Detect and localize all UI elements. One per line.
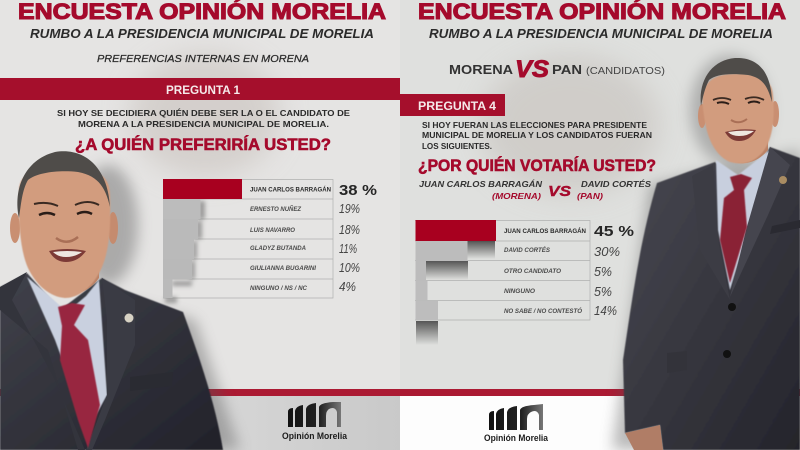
question text: pregunta 1 (57, 108, 350, 129)
portrait shadow (78, 165, 240, 450)
hair (17, 151, 110, 218)
heading: Morena vs PAN: PAN (552, 63, 582, 77)
footer: right logo band (400, 396, 800, 450)
face (703, 74, 774, 163)
neck (716, 125, 768, 163)
banner: pregunta 4: PREGUNTA 4 (418, 101, 497, 113)
matchup: candidates: (PAN) (577, 191, 603, 201)
right ear (108, 212, 118, 244)
bar: Ninguno 4% (163, 279, 172, 298)
matchup: candidates: VS (548, 183, 571, 200)
left lapel (0, 272, 85, 450)
labels and values: JUAN CARLOS BARRAGÁN (504, 228, 586, 235)
panel: left background (0, 0, 400, 390)
labels and values: 4% (339, 280, 356, 294)
question text: pregunta 4: SI HOY FUERAN LAS ELECCIONES PARA PRESIDENTE (422, 120, 647, 130)
bar: Luis Navarro 18% (163, 219, 198, 239)
hair (701, 58, 772, 106)
banner: pregunta 1: PREGUNTA 1 (166, 85, 241, 97)
labels and values: NO SABE / NO CONTESTÓ (504, 308, 582, 315)
labels and values: 38 % (339, 182, 377, 199)
labels and values: GLADYZ BUTANDA (250, 246, 306, 252)
button lower (723, 350, 731, 358)
heading: Morena vs PAN: (CANDIDATOS) (586, 66, 665, 77)
lapel pin (779, 176, 787, 184)
bar chart: pregunta 1 (163, 179, 377, 303)
portrait shadow (612, 55, 800, 450)
lapel pin (124, 314, 134, 322)
logo: left: Opinión Morelia (282, 431, 348, 441)
heading: Morena vs PAN: VS (515, 56, 549, 83)
breast pocket (770, 220, 800, 234)
hand (625, 425, 663, 450)
nose (56, 237, 78, 242)
bar: No sabe 14% (416, 301, 438, 320)
labels and values: ERNESTO NUÑEZ (250, 206, 301, 213)
labels and values: 11% (339, 242, 357, 256)
bar: Giulianna Bugarini 10% (163, 259, 192, 279)
right lapel (730, 147, 790, 297)
question heading: a quien preferiria: ¿A QUIÉN PREFERIRÍA USTED? (75, 135, 331, 154)
neck (30, 250, 99, 294)
side pocket (667, 351, 687, 373)
portrait: candidate right (612, 55, 800, 450)
labels and values: NINGUNO / NS / NC (250, 286, 308, 292)
matchup: candidates: (MORENA) (492, 191, 541, 201)
logo: right: Opinión Morelia (484, 433, 549, 443)
shirt (27, 277, 107, 430)
question text: pregunta 4: LOS SIGUIENTES. (422, 141, 492, 151)
banner: pregunta 4 (400, 94, 505, 116)
logo: left (282, 402, 348, 441)
labels and values: OTRO CANDIDATO (504, 269, 561, 275)
question heading: por quien votaria: ¿POR QUIÉN VOTARÍA USTED? (418, 156, 656, 175)
matchup: candidates: JUAN CARLOS BARRAGÁN (419, 179, 543, 189)
right ear (771, 101, 779, 127)
nose (731, 119, 747, 122)
button upper (728, 303, 736, 311)
labels and values: 45 % (594, 223, 634, 240)
labels and values: JUAN CARLOS BARRAGÁN (250, 186, 331, 194)
bar shadows (416, 241, 495, 345)
bar: David Cortés 30% (416, 241, 468, 261)
breast pocket (130, 372, 173, 391)
labels and values: 10% (339, 261, 360, 275)
bar: Juan Carlos Barragán 45% (416, 220, 496, 241)
bar: Juan Carlos Barragán 38% (163, 179, 242, 199)
bar shadows (165, 201, 205, 303)
subtitle: left: RUMBO A LA PRESIDENCIA MUNICIPAL DE MORELIA (30, 26, 374, 41)
labels and values: 30% (594, 245, 620, 259)
eyes and brows (713, 97, 764, 104)
smile (725, 129, 756, 141)
suit (623, 147, 800, 450)
left ear (698, 104, 706, 128)
labels and values: 19% (339, 202, 360, 216)
matchup: candidates: DAVID CORTÉS (581, 179, 651, 189)
subtitle: right: RUMBO A LA PRESIDENCIA MUNICIPAL DE MORELIA (429, 26, 773, 41)
question text: pregunta 1: SI HOY SE DECIDIERA QUIÉN DEBE SER LA O EL CANDIDATO DE (57, 108, 350, 118)
footer: left logo band (0, 396, 400, 450)
bar chart: pregunta 4 (415, 220, 634, 345)
labels and values: 5% (594, 285, 612, 299)
logo: right (484, 404, 549, 443)
shirt (716, 150, 770, 290)
tie (58, 303, 100, 448)
labels and values: DAVID CORTÉS (504, 246, 550, 254)
portrait: candidate left (0, 151, 240, 450)
question text: pregunta 4: MUNICIPAL DE MORELIA Y LOS CANDIDATOS FUERAN (422, 130, 652, 140)
bar: Ninguno 5% (416, 281, 428, 300)
question text: pregunta 1: MORENA A LA PRESIDENCIA MUNICIPAL DE MORELIA. (78, 119, 329, 129)
labels and values: GIULIANNA BUGARINI (250, 266, 316, 272)
row lines (415, 220, 590, 320)
bar: Otro candidato 5% (416, 261, 426, 281)
labels and values: 18% (339, 223, 360, 237)
labels and values: 14% (594, 304, 617, 318)
left lapel (692, 165, 730, 300)
eyes and brows (34, 202, 99, 215)
tie (720, 174, 752, 283)
row lines (163, 180, 333, 298)
question text: pregunta 4 (422, 120, 652, 151)
banner: pregunta 1 (0, 78, 400, 100)
labels and values: 5% (594, 265, 612, 279)
heading: Morena vs PAN: MORENA (449, 63, 513, 77)
matchup: candidates (419, 179, 651, 201)
labels and values (250, 182, 377, 294)
suit (0, 273, 223, 450)
bar: Gladyz Butanda 11% (163, 239, 194, 259)
labels and values (504, 223, 634, 318)
labels and values: LUIS NAVARRO (250, 228, 295, 234)
left ear (10, 213, 20, 243)
right lapel (86, 278, 135, 450)
section label: preferencias internas: PREFERENCIAS INTERNAS EN MORENA (97, 53, 309, 65)
labels and values: NINGUNO (504, 289, 535, 295)
heading: Morena vs PAN (449, 56, 665, 83)
panel: right background (400, 0, 800, 390)
footer red stripe (0, 389, 800, 396)
smile (49, 249, 86, 262)
bar: Ernesto Nuñez 19% (163, 199, 200, 219)
face (19, 168, 110, 298)
